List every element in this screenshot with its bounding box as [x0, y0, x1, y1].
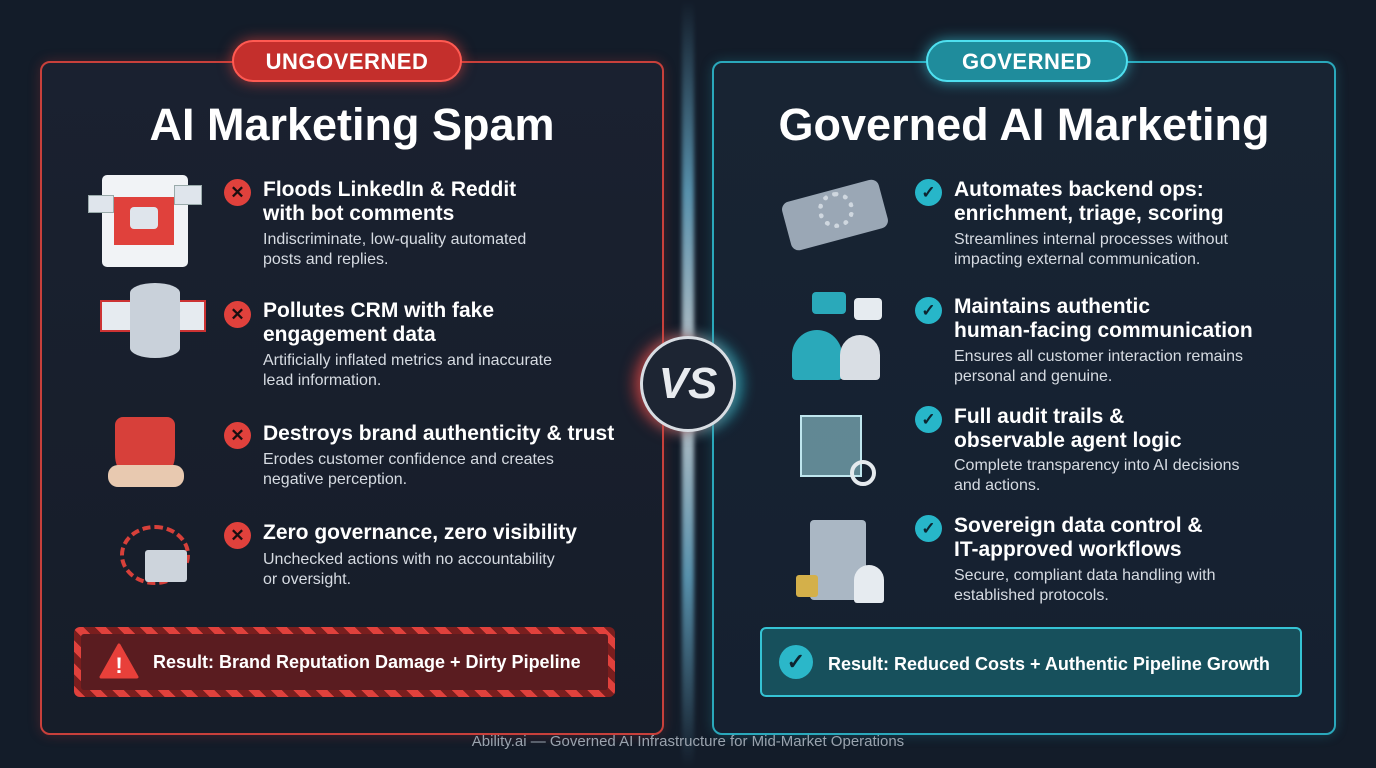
icon: people chat	[812, 292, 846, 314]
desc r3: and actions.	[954, 477, 1040, 494]
panel: ungoverned	[40, 61, 664, 735]
desc r4: established protocols.	[954, 587, 1109, 604]
desc 1: Indiscriminate, low-quality automated	[263, 231, 526, 248]
heading r3: observable agent logic	[954, 429, 1182, 452]
pill: ungoverned: UNGOVERNED	[266, 49, 428, 74]
heading 1	[262, 178, 516, 225]
check 1	[915, 179, 942, 206]
pill: ungoverned	[232, 40, 462, 82]
heading 2	[263, 299, 494, 346]
check 1: ✓	[921, 183, 936, 202]
panel: governed	[712, 61, 1336, 735]
x 4	[224, 522, 251, 549]
desc r2: personal and genuine.	[954, 368, 1112, 385]
x 2	[224, 301, 251, 328]
desc r3: Complete transparency into AI decisions	[954, 457, 1239, 474]
heading r4: Sovereign data control &	[954, 514, 1203, 537]
desc r1	[954, 231, 1228, 268]
desc r1: impacting external communication.	[954, 251, 1200, 268]
desc 3	[263, 451, 554, 488]
desc 2: Artificially inflated metrics and inaccurate	[263, 352, 552, 369]
heading r3	[954, 405, 1182, 452]
desc r1: Streamlines internal processes without	[954, 231, 1228, 248]
heading r1: Automates backend ops:	[954, 178, 1204, 201]
icon: warning: !	[115, 653, 123, 678]
desc 4	[263, 551, 555, 588]
heading r2: Maintains authentic	[954, 295, 1150, 318]
heading r3: Full audit trails &	[954, 405, 1124, 428]
vs badge: VS	[659, 359, 717, 408]
heading 1: Floods LinkedIn & Reddit	[263, 178, 516, 201]
desc 2: lead information.	[263, 372, 381, 389]
icon: broken shield handshake	[115, 417, 175, 485]
heading r2	[954, 295, 1253, 342]
result right	[760, 627, 1302, 697]
x 3: ✕	[230, 426, 245, 445]
result left	[74, 627, 615, 697]
center divider glow	[682, 0, 694, 768]
heading r1: enrichment, triage, scoring	[954, 202, 1224, 225]
heading r4: IT-approved workflows	[954, 538, 1182, 561]
desc 3: negative perception.	[263, 471, 407, 488]
right icons	[782, 180, 888, 603]
icon: warning	[100, 643, 138, 678]
x 4: ✕	[230, 526, 245, 545]
footer: Ability.ai — Governed AI Infrastructure for Mid-Market Operations	[472, 733, 904, 750]
check 2	[915, 297, 942, 324]
x 1: ✕	[230, 183, 245, 202]
x 2: ✕	[230, 305, 245, 324]
icon: server stack	[810, 520, 866, 600]
check 3: ✓	[921, 410, 936, 429]
check 2: ✓	[921, 301, 936, 320]
icon: crm database	[100, 300, 140, 332]
heading 3: Destroys brand authenticity & trust	[263, 422, 614, 445]
desc r2	[954, 348, 1243, 385]
desc 3: Erodes customer confidence and creates	[263, 451, 554, 468]
x 3	[224, 422, 251, 449]
icon: audit cube	[800, 415, 862, 477]
result left: Result: Brand Reputation Damage + Dirty Pipeline	[153, 652, 581, 672]
desc r2: Ensures all customer interaction remains	[954, 348, 1243, 365]
desc r3	[954, 457, 1239, 494]
heading 2: engagement data	[263, 323, 436, 346]
check 4	[915, 515, 942, 542]
vs badge	[640, 336, 736, 432]
heading 1: with bot comments	[263, 202, 454, 225]
heading 4: Zero governance, zero visibility	[263, 521, 577, 544]
desc r4: Secure, compliant data handling with	[954, 567, 1216, 584]
desc 1: posts and replies.	[263, 251, 388, 268]
heading r4	[954, 514, 1203, 561]
x 1	[224, 179, 251, 206]
heading r2: human-facing communication	[954, 319, 1253, 342]
check 4: ✓	[921, 519, 936, 538]
title left: AI Marketing Spam	[149, 99, 555, 150]
desc r4	[954, 567, 1216, 604]
pill: governed	[926, 40, 1128, 82]
left icons	[88, 175, 206, 585]
result right: ✓	[787, 649, 805, 674]
title right: Governed AI Marketing	[779, 99, 1269, 150]
check 3	[915, 406, 942, 433]
heading 2: Pollutes CRM with fake	[263, 299, 494, 322]
heading r1	[954, 178, 1224, 225]
result right: Result: Reduced Costs + Authentic Pipeline Growth	[828, 654, 1270, 674]
desc 4: Unchecked actions with no accountability	[263, 551, 555, 568]
desc 1	[263, 231, 526, 268]
icon: automation pipeline	[780, 178, 890, 252]
desc 4: or oversight.	[263, 571, 351, 588]
icon: social post robot	[102, 175, 188, 267]
desc 2	[263, 352, 552, 389]
pill: governed: GOVERNED	[962, 49, 1092, 74]
icon: gears	[120, 525, 190, 585]
